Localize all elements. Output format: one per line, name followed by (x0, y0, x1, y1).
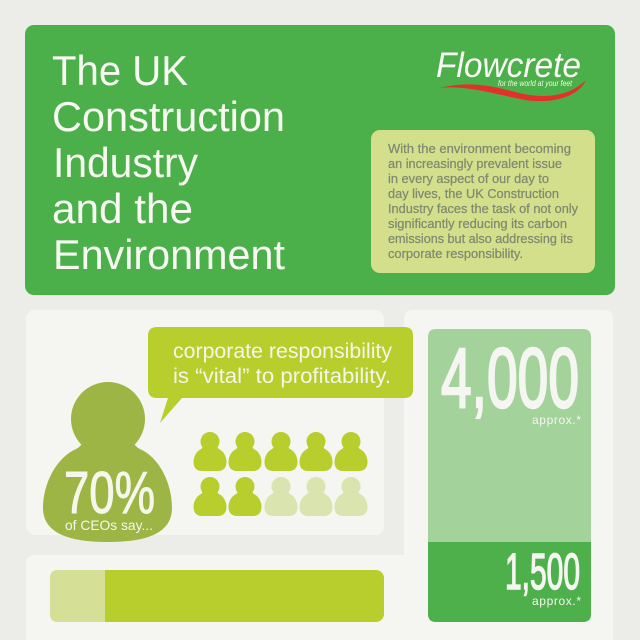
icon: large person: 70% (64, 460, 155, 526)
speech bubble (148, 327, 413, 423)
logo: Flowcrete: Flowcrete (436, 46, 581, 85)
panel: lower bar (26, 555, 404, 640)
intro text box: an increasingly prevalent issue (388, 157, 562, 171)
value: 1,500 (505, 543, 581, 608)
title: and the (52, 185, 193, 232)
value: 1,500: approx.* (532, 594, 581, 608)
stacked column chart (428, 329, 591, 622)
intro text box: in every aspect of our day to (388, 172, 549, 186)
icon: large person (43, 382, 172, 542)
bar chart (50, 570, 384, 622)
intro text box: day lives, the UK Construction (388, 187, 559, 201)
intro text box: With the environment becoming (388, 142, 571, 156)
icon: large person: of CEOs say... (65, 517, 153, 533)
panel: numbers (404, 310, 613, 640)
intro text box: Industry faces the task of not only (388, 202, 579, 216)
panel: header (25, 25, 615, 295)
pictogram: 7 of 10 people (194, 432, 368, 516)
intro text box (371, 130, 595, 273)
speech bubble: is “vital” to profitability. (173, 364, 391, 388)
intro text box: significantly reducing its carbon (388, 217, 567, 231)
panel: CEOs (26, 310, 413, 542)
title: Industry (53, 139, 198, 186)
intro text box: emissions but also addressing its (388, 232, 573, 246)
value: 4,000 (441, 331, 581, 427)
logo: Flowcrete: for the world at your feet (498, 79, 573, 88)
speech bubble: corporate responsibility (173, 339, 392, 363)
title: Construction (52, 93, 285, 140)
intro text box: corporate responsibility. (388, 247, 523, 261)
value: 1,500: 1,500 (505, 543, 580, 600)
title (52, 47, 285, 278)
title: Environment (53, 231, 285, 278)
title: The UK (52, 47, 188, 94)
value: 4,000: approx.* (532, 413, 581, 427)
